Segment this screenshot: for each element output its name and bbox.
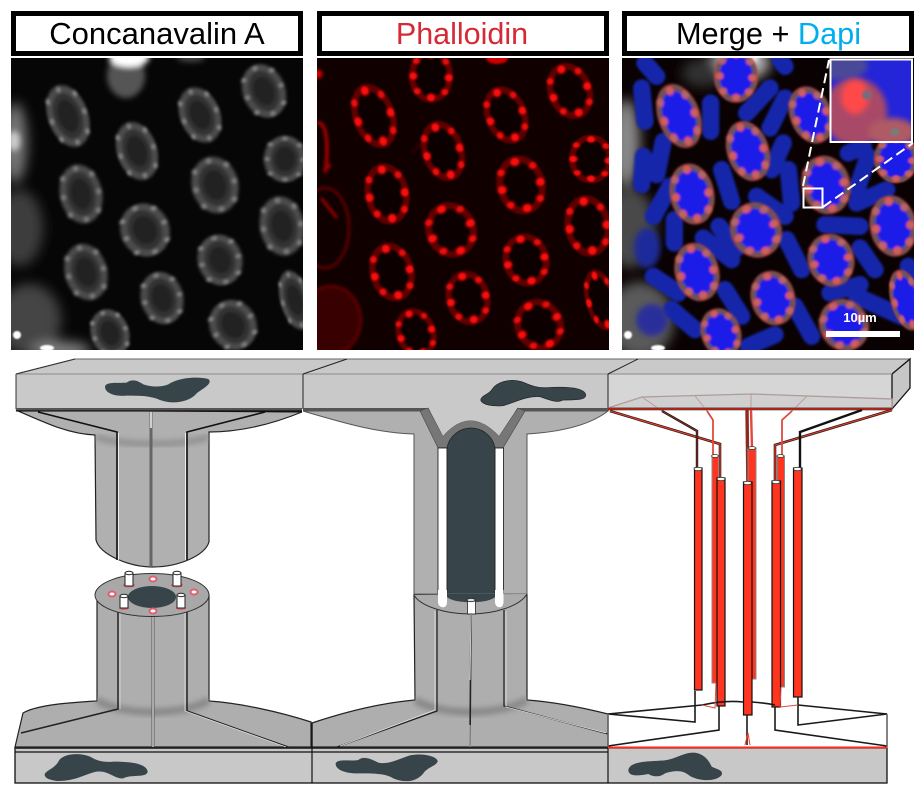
cell 2: upper half with notch and nucleus (303, 380, 608, 608)
heading: Concanavalin A (14, 14, 300, 54)
scale bar: 10µm (843, 310, 877, 325)
actin filament bundles (694, 446, 802, 715)
micrograph: Merge + Dapi (622, 58, 914, 350)
heading: Concanavalin A: Concanavalin A (49, 16, 265, 51)
nucleus: top middle (481, 380, 586, 406)
nucleus: top left (105, 378, 210, 402)
disc with actin sockets (95, 571, 209, 616)
cell 2: lower half (312, 590, 608, 747)
cell 1: upper half (16, 378, 302, 567)
heading: Merge + Dapi: Merge + Dapi (676, 16, 861, 51)
zoom marker box and dashed leader lines (803, 60, 913, 208)
top epithelial slab (16, 359, 910, 409)
nucleus: bottom right (628, 753, 722, 780)
micrograph: Concanavalin A (11, 58, 303, 350)
heading: Phalloidin: Phalloidin (396, 17, 528, 51)
nucleus: bottom middle (336, 754, 438, 781)
nucleus: elongated (447, 428, 495, 599)
micrograph: Phalloidin (317, 58, 609, 350)
rod-shaped blue nuclei (642, 60, 912, 346)
basal slab (15, 723, 887, 783)
heading: Merge + Dapi (624, 14, 912, 54)
inset: magnified detail (808, 52, 916, 146)
nucleus: bottom left (45, 754, 148, 781)
cell 3: lower wireframe (608, 683, 887, 747)
heading: Phalloidin (320, 14, 606, 54)
cell 3: translucent top face and wireframe (608, 394, 892, 493)
cell 1: lower half with disc (15, 571, 311, 747)
scale bar (826, 310, 900, 337)
